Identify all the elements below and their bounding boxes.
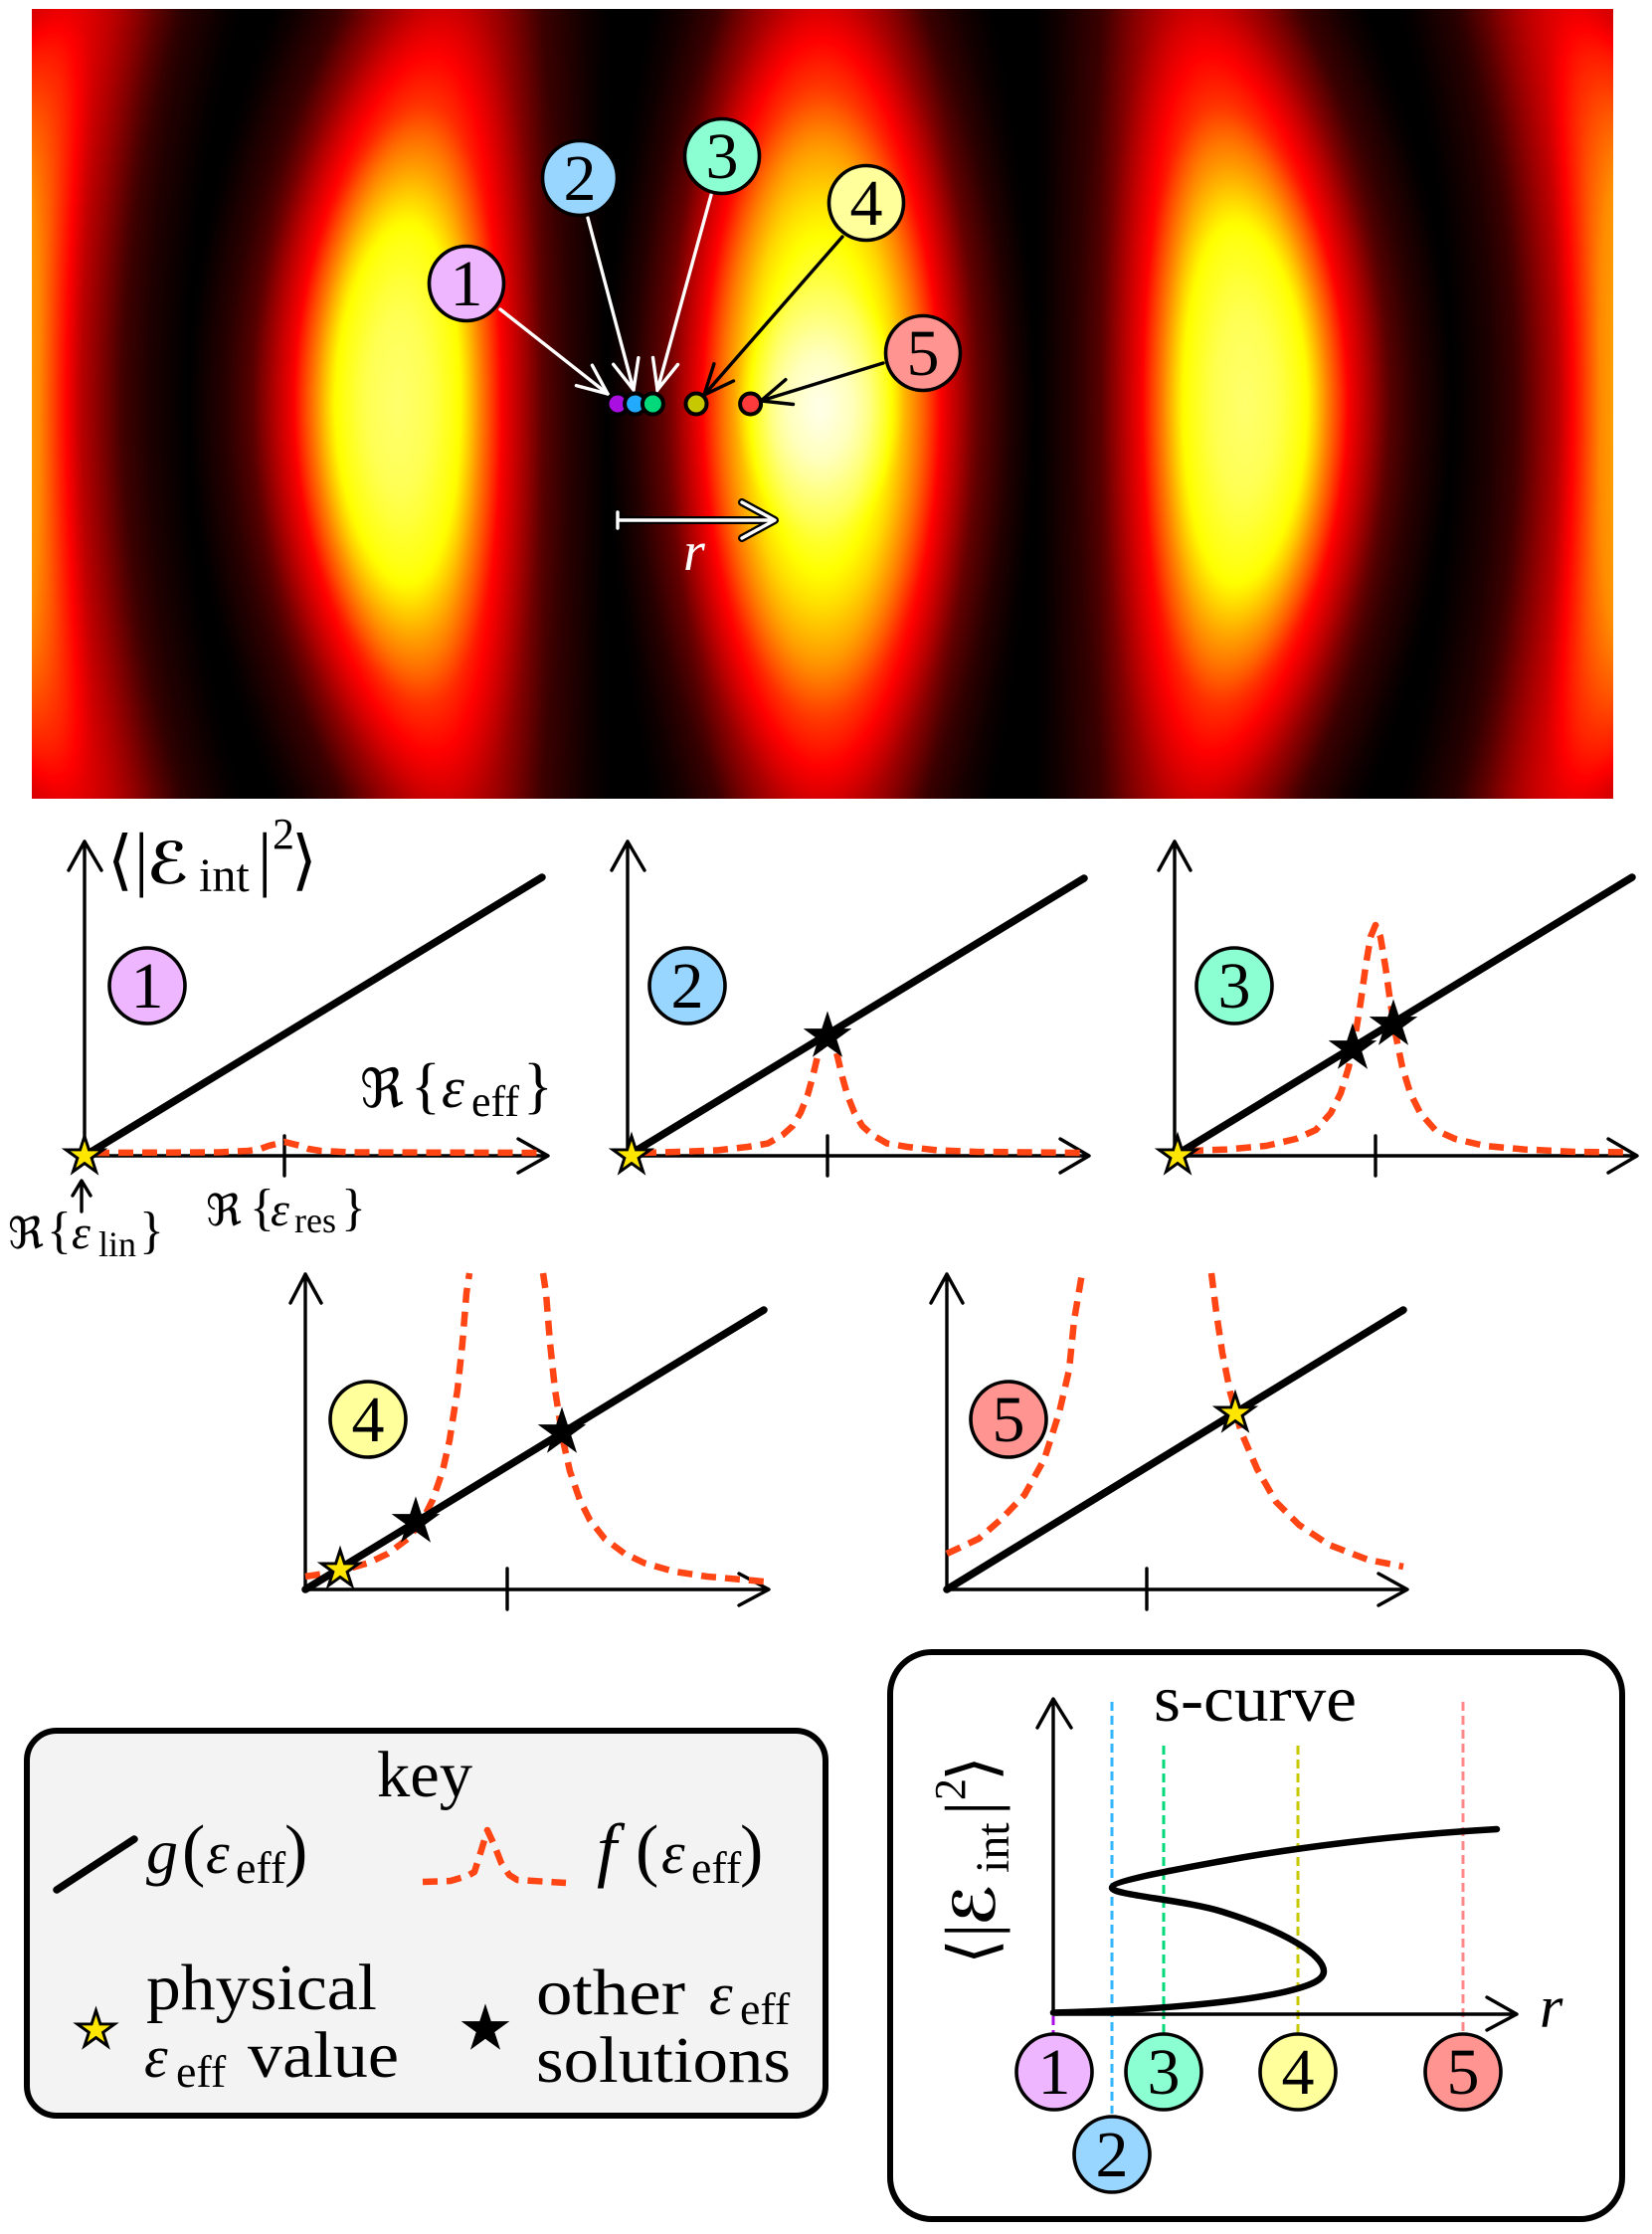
arrow: point 2 (588, 218, 639, 390)
s-curve line (1053, 1829, 1497, 2013)
y-axis label: | (258, 819, 272, 898)
s-curve box (890, 1652, 1622, 2219)
panel: key (27, 1731, 826, 2116)
axis label: rotated intensity: int (967, 1822, 1019, 1873)
panel: s-curve (890, 1652, 1622, 2219)
legend line: g (57, 1839, 134, 1890)
badge 5: 5 (907, 317, 939, 390)
badge 1: 1 (450, 248, 483, 320)
y-axis label: ⟨ (107, 822, 133, 898)
heat map intensity field (32, 9, 1613, 799)
axes (69, 841, 548, 1176)
badge 4: 4 (849, 167, 883, 240)
badge 4: 4 (352, 1384, 384, 1456)
curve: f right branch (1211, 1273, 1403, 1567)
panel: plot 3 (1159, 841, 1637, 1176)
tick label: resonance: ℜ (206, 1186, 242, 1236)
badge 3 (684, 119, 760, 193)
axis label: rotated intensity: ℰ (941, 1884, 1009, 1926)
legend label: g: eff (236, 1842, 286, 1893)
physical star (66, 1136, 103, 1172)
y-axis label: ℰ (147, 830, 189, 897)
physical star (613, 1136, 650, 1172)
axis label: r: r (1540, 1974, 1563, 2040)
arrow: point 1 (500, 309, 608, 394)
y-axis label: ⟩ (291, 822, 317, 898)
axes (290, 1274, 769, 1609)
legend label: g: g (146, 1816, 178, 1887)
badge 2: 2 (563, 142, 597, 215)
other solution star (805, 1013, 850, 1055)
legend label: f: eff (691, 1842, 742, 1893)
line: g (947, 1310, 1403, 1589)
line: g (628, 878, 1084, 1156)
badge 5 (1425, 2034, 1501, 2110)
line: g (305, 1310, 764, 1589)
panel: plot 2 (612, 841, 1089, 1176)
line: g (1175, 877, 1632, 1156)
x-axis label: eff (471, 1077, 519, 1126)
badge 1 (430, 247, 503, 320)
legend label: f: f (597, 1809, 626, 1889)
axis label: rotated intensity: | (931, 1924, 1010, 1938)
badge 4 (330, 1382, 406, 1457)
badge 5 (971, 1382, 1046, 1457)
arrow: point 3 (652, 195, 711, 390)
other solution stars (393, 1408, 585, 1541)
s-curve heading: s-curve (1154, 1663, 1357, 1736)
key heading: key (377, 1739, 472, 1811)
badge 2 (1074, 2117, 1150, 2192)
legend label: g: ( (182, 1812, 205, 1889)
badge 5: 5 (993, 1384, 1024, 1456)
curve: f (1189, 925, 1631, 1152)
legend label: f: ) (740, 1812, 763, 1889)
tick label: resonance: res (294, 1201, 336, 1240)
badge 3 (1126, 2034, 1201, 2110)
x-axis label: ℜ (360, 1057, 404, 1120)
y-axis label: | (134, 819, 148, 898)
panel: heat map with sample points (32, 9, 1613, 799)
dashed guides (1053, 1702, 1463, 2114)
tick label: resonance: ε (271, 1184, 289, 1236)
tick label: linear: ε (72, 1207, 91, 1259)
legend label: f: ε (661, 1820, 685, 1886)
other solution stars (1330, 1001, 1416, 1067)
legend text: physical value (144, 1952, 399, 2097)
line: g (85, 877, 542, 1156)
badge 1: 1 (131, 950, 163, 1023)
physical star (1159, 1136, 1196, 1172)
badge 1 (1016, 2034, 1092, 2110)
badge 2 (649, 948, 725, 1024)
x-axis label: } (523, 1052, 553, 1120)
physical star (1216, 1394, 1254, 1429)
legend text: physical value: value (248, 2019, 399, 2092)
badge 1: 1 (1038, 2036, 1070, 2109)
legend label: g: ) (284, 1812, 307, 1889)
x-axis label: ε (442, 1055, 464, 1120)
axes (1037, 1699, 1517, 2030)
legend text: physical value: eff (176, 2046, 227, 2097)
legend text: other solutions: solutions (536, 2024, 791, 2097)
legend text: other solutions: other (536, 1956, 685, 2029)
legend star: other (462, 2005, 508, 2048)
badge 1 (109, 948, 185, 1024)
axis label: rotated intensity: | (931, 1801, 1010, 1815)
badge 4 (1260, 2034, 1336, 2110)
tick label: linear: lin (98, 1224, 136, 1264)
sample point dots (607, 394, 761, 414)
axis label: rotated intensity: 2 (926, 1778, 975, 1800)
panel: plot 4 (290, 1273, 769, 1609)
arrow: point 4 (704, 237, 842, 395)
x-axis label: { (411, 1052, 441, 1120)
curve: f (642, 1029, 1084, 1153)
axis label: rotated intensity (926, 1756, 1019, 1964)
legend text: other solutions: ε (709, 1961, 733, 2027)
axes (931, 1274, 1407, 1609)
badge 5 (885, 316, 961, 390)
label: r: r (683, 521, 705, 583)
badge 3 (1196, 948, 1272, 1024)
badge 2: 2 (670, 950, 704, 1023)
arrow: point 5 (761, 363, 883, 404)
badge 4 (829, 165, 903, 241)
curve: f left branch (947, 1273, 1082, 1554)
badge 4: 4 (1281, 2036, 1315, 2109)
tick label: linear: } (139, 1203, 164, 1259)
badge 3: 3 (1217, 950, 1251, 1023)
arrow: radial coordinate r (618, 502, 775, 538)
tick label: linear: { (47, 1203, 72, 1259)
small arrow to linear value (73, 1181, 91, 1211)
legend text: physical value: physical (146, 1952, 377, 2024)
legend star: physical (78, 2010, 114, 2046)
curve: f left branch (305, 1273, 469, 1577)
tick label: resonance: { (250, 1180, 275, 1236)
badge 5: 5 (1446, 2036, 1480, 2109)
key box (27, 1731, 826, 2116)
badge 3: 3 (706, 120, 738, 193)
legend text: other solutions (536, 1956, 791, 2097)
legend label: f: ( (636, 1812, 658, 1889)
legend label: g: ε (206, 1820, 230, 1886)
badge 2 (543, 141, 617, 215)
tick label: linear: ℜ (8, 1209, 44, 1259)
axes (612, 841, 1089, 1176)
axis label: rotated intensity: ⟩ (934, 1756, 1010, 1781)
y-axis label: int (199, 849, 250, 902)
panel: plot 5 (931, 1273, 1407, 1609)
y-axis label: 2 (273, 810, 294, 858)
badge 2: 2 (1096, 2119, 1128, 2191)
tick label: resonance: } (341, 1180, 366, 1236)
physical star (321, 1550, 359, 1585)
legend curve: f (423, 1830, 566, 1883)
axis label: rotated intensity: ⟨ (934, 1939, 1010, 1964)
legend text: physical value: ε (144, 2024, 168, 2090)
curve: f right branch (543, 1273, 764, 1582)
curve: f (94, 1142, 542, 1153)
panel: plot 1 (8, 810, 553, 1264)
badge 3: 3 (1148, 2036, 1180, 2109)
legend text: other solutions: eff (740, 1983, 791, 2034)
axes (1159, 841, 1637, 1176)
